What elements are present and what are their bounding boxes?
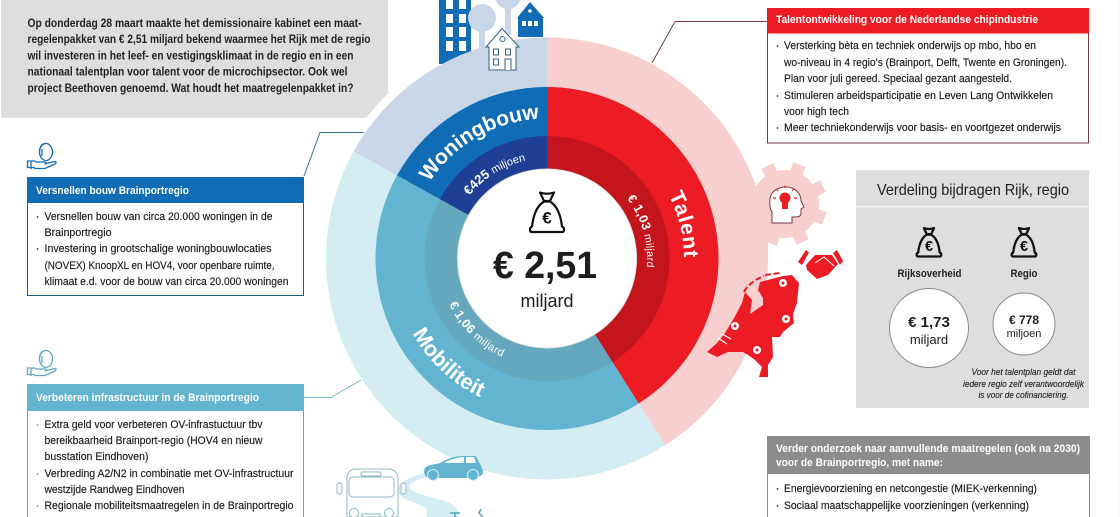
panel: talentontwikkeling: Versterking bèta en techniek onderwijs op mbo, hbo en xyxy=(784,40,1036,52)
panel: talentontwikkeling xyxy=(767,8,1089,143)
panel: talentontwikkeling: Stimuleren arbeidsparticipatie en Leven Lang Ontwikkelen xyxy=(784,90,1053,102)
panel: verbeteren infrastructuur: westzijde Randweg Eindhoven xyxy=(44,484,184,496)
panel: introduction xyxy=(1,0,776,488)
panel: talentontwikkeling: wo-niveau in 4 regio’s (Brainport, Delft, Twente en Groningen). xyxy=(783,57,1067,69)
icon: head with lightbulb xyxy=(770,186,804,223)
panel: versnellen bouw xyxy=(27,177,304,296)
circle: 778 miljoen: € 778 xyxy=(1009,313,1039,327)
circle: 778 miljoen xyxy=(993,293,1055,355)
panel: verbeteren infrastructuur: Extra geld voor verbeteren OV-infrastuctuur tbv xyxy=(44,419,263,431)
label: Mobiliteit: Mobiliteit xyxy=(413,326,485,397)
icon: money bag Rijksoverheid xyxy=(917,228,941,257)
circle: 1,73 miljard: miljard xyxy=(910,332,948,347)
chart: inner ring with segments xyxy=(424,136,670,381)
icon: white house xyxy=(486,28,519,70)
icon: gear xyxy=(731,150,839,258)
panel: talentontwikkeling: Plan voor juli gereed. Speciaal gezant aangesteld. xyxy=(784,73,1012,85)
chart: middle ring with segments xyxy=(376,87,719,430)
panel: verder onderzoek: Energievoorziening en netcongestie (MIEK-verkenning) xyxy=(784,483,1037,495)
panel: versnellen bouw: Brainportregio xyxy=(44,227,112,239)
label: 425 miljoen: €425 miljoen xyxy=(464,155,525,194)
label: 1,03 miljard: € 1,03 miljard xyxy=(628,195,654,267)
icon: map of the Netherlands xyxy=(707,273,799,377)
connector: talent xyxy=(652,22,768,63)
label: Woningbouw: Woningbouw xyxy=(418,108,538,180)
circle: 1,73 miljard: € 1,73 xyxy=(908,314,950,331)
panel: talentontwikkeling: Talentontwikkeling voor de Nederlandse chipindustrie xyxy=(776,14,1038,26)
panel: introduction: wil investeren in het leef- en vestigingsklimaat in de regio en in een xyxy=(27,50,353,62)
panel: introduction: regelenpakket van € 2,51 miljard bekend waarmee het Rijk met de regio xyxy=(28,34,370,46)
icon: winding road xyxy=(398,473,458,517)
panel: verdeling bijdragen: Rijksoverheid xyxy=(898,268,962,280)
panel: introduction: project Beethoven genoemd. Wat houdt het maatregelenpakket in? xyxy=(28,83,354,95)
panel: talentontwikkeling: Meer techniekonderwijs voor basis- en voortgezet onderwijs xyxy=(784,122,1061,134)
label: 1,06 miljard: € 1,06 miljard xyxy=(450,302,505,356)
icon: money bag Regio: € xyxy=(1020,239,1028,255)
panel: verder onderzoek xyxy=(767,436,1090,517)
panel: versnellen bouw: (NOVEX) KnoopXL en HOV4, voor openbare ruimte, xyxy=(44,260,274,272)
note: cofinanciering xyxy=(963,367,1084,400)
circle: 1,73 miljard xyxy=(890,288,968,368)
panel: talentontwikkeling: voor high tech xyxy=(784,106,849,118)
icon: hand with coin 1 xyxy=(28,144,56,169)
icon: hand with coin 2 xyxy=(28,350,56,376)
center total: miljard xyxy=(520,291,574,311)
panel: verdeling bijdragen: Regio xyxy=(1010,268,1038,280)
icon: car xyxy=(424,456,483,480)
panel: verbeteren infrastructuur: Verbreding A2/N2 in combinatie met OV-infrastructuur xyxy=(44,468,294,480)
icon: money bag: € xyxy=(542,208,552,228)
center total: € 2,51 xyxy=(493,245,597,287)
center total xyxy=(458,169,636,348)
panel: introduction: nationaal talentplan voor talent voor de microchipsector. Ook wel xyxy=(28,66,348,78)
icon: scooter xyxy=(450,509,483,517)
panel: verder onderzoek: Verder onderzoek naar aanvullende maatregelen (ook na 2030) xyxy=(776,443,1080,455)
panel: verdeling bijdragen: Verdeling bijdragen Rijk, regio xyxy=(877,182,1069,199)
icon: money bag Regio xyxy=(1012,228,1036,257)
icon: bus xyxy=(337,469,406,517)
connector: woningbouw xyxy=(304,132,364,176)
panel: versnellen bouw: Investering in grootschalige woningbouwlocaties xyxy=(44,243,272,255)
note: cofinanciering: iedere regio zelf verantwoordelijk xyxy=(963,379,1084,389)
panel: verbeteren infrastructuur: busstation Eindhoven) xyxy=(44,451,148,463)
connector: mobiliteit xyxy=(304,380,361,398)
chart: outer ring with segments xyxy=(326,38,768,479)
panel: introduction: Op donderdag 28 maart maakte het demissionaire kabinet een maat- xyxy=(28,18,362,30)
panel: versnellen bouw: klimaat e.d. voor de bouw van circa 20.000 woningen xyxy=(44,276,288,288)
icon: money bag Rijksoverheid: € xyxy=(925,239,933,255)
icon: city and houses xyxy=(439,0,544,64)
circle: 778 miljoen: miljoen xyxy=(1007,328,1041,340)
panel: versnellen bouw: Versnellen bouw van circa 20.000 woningen in de xyxy=(44,211,272,223)
panel: versnellen bouw: Versnellen bouw Brainportregio xyxy=(36,185,189,197)
panel: verder onderzoek: Sociaal maatschappelijke voorzieningen (verkenning) xyxy=(784,500,1029,512)
panel: verdeling bijdragen xyxy=(856,170,1089,408)
panel: verder onderzoek: voor de Brainportregio, met name: xyxy=(776,457,943,469)
label: Talent: Talent xyxy=(670,189,698,258)
note: cofinanciering: Voor het talentplan geldt dat xyxy=(972,367,1076,377)
panel: verbeteren infrastructuur: Regionale mobiliteitsmaatregelen in de Brainportregio xyxy=(44,500,294,512)
note: cofinanciering: is voor de cofinanciering. xyxy=(978,390,1068,400)
icon: money bag xyxy=(530,192,564,232)
panel: verbeteren infrastructuur: bereikbaarheid Brainport-regio (HOV4 en nieuw xyxy=(44,435,263,447)
panel: verbeteren infrastructuur: Verbeteren infrastructuur in de Brainportregio xyxy=(36,392,259,404)
panel: verbeteren infrastructuur xyxy=(27,384,304,517)
icon: handshake xyxy=(798,250,843,279)
